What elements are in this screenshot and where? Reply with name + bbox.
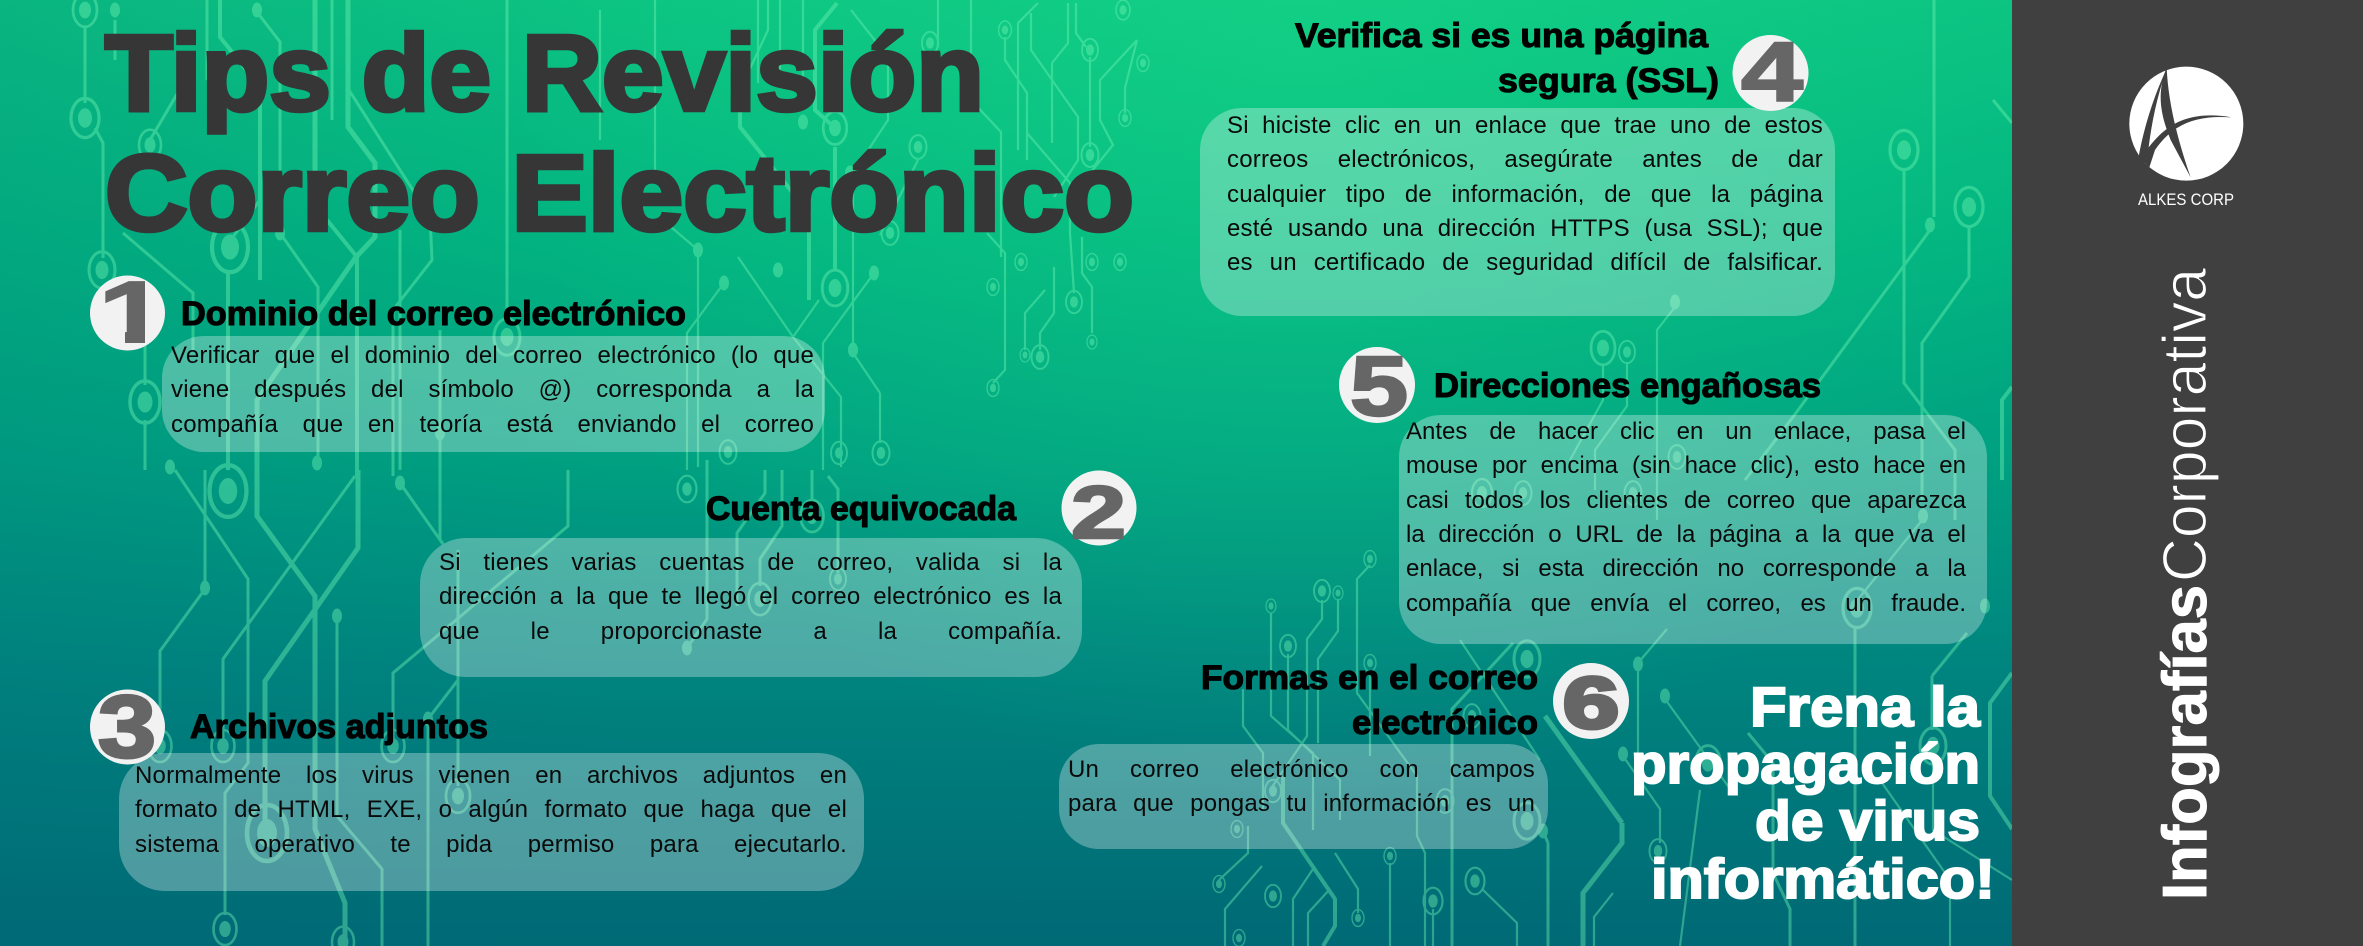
heading 3: Archivos adjuntos xyxy=(190,708,488,746)
dot nodes xyxy=(275,228,285,240)
number badge 5 xyxy=(1339,339,1415,433)
panel 3 xyxy=(119,753,864,891)
tip 1 xyxy=(90,264,825,452)
panel 5: la dirección o URL de la página a la que va el xyxy=(1406,521,1966,548)
panel 4: Si hiciste clic en un enlace que trae uno de estos xyxy=(1227,112,1823,139)
panel 1: viene después del símbolo @) corresponda a la xyxy=(171,376,814,403)
vertical brand text: Infografías xyxy=(2151,585,2220,900)
panel 6: Un correo electrónico con campos xyxy=(1068,756,1535,783)
number badge 4 xyxy=(1732,25,1808,119)
callout: slogan: propagación xyxy=(1631,732,1980,795)
number badge 1 xyxy=(90,276,165,350)
callout: slogan: de virus xyxy=(1755,789,1980,852)
number badge 5: 5 xyxy=(1350,339,1408,433)
ring nodes xyxy=(73,0,97,27)
number badge 3: 3 xyxy=(98,677,156,776)
number badge 4: 4 xyxy=(1741,25,1803,119)
panel 6 xyxy=(1059,744,1548,849)
tip 2 xyxy=(420,470,1136,677)
tip 3 xyxy=(90,677,864,891)
number badge 2 xyxy=(1062,470,1136,554)
icon: logo circle xyxy=(2129,67,2243,181)
panel 4: es un certificado de seguridad difícil de falsificar. xyxy=(1227,249,1823,276)
number badge 6 xyxy=(1553,663,1629,744)
callout: slogan: informático! xyxy=(1651,847,1995,910)
panel 1 xyxy=(162,336,825,452)
number badge 1: 1 xyxy=(98,264,170,361)
logo name: ALKES CORP xyxy=(2138,191,2234,209)
heading 6: electrónico xyxy=(1352,704,1538,742)
panel 2: que le proporcionaste a la compañía. xyxy=(439,618,1062,645)
vertical brand text: Corporativa xyxy=(2151,268,2220,582)
panel 2: Si tienes varias cuentas de correo, valida si la xyxy=(439,549,1062,576)
panel 3: formato de HTML, EXE, o algún formato que haga que el xyxy=(135,796,847,823)
callout: slogan xyxy=(1631,675,1995,910)
heading 4: segura (SSL) xyxy=(1498,62,1719,100)
panel 3: sistema operativo te pida permiso para ejecutarlo. xyxy=(135,831,847,858)
vertical brand text xyxy=(2151,268,2220,900)
panel 3: Normalmente los virus vienen en archivos adjuntos en xyxy=(135,762,847,789)
callout: slogan: Frena la xyxy=(1750,675,1981,738)
panel 5: Antes de hacer clic en un enlace, pasa el xyxy=(1406,418,1966,445)
panel 1: Verificar que el dominio del correo electrónico (lo que xyxy=(171,342,814,369)
heading 4: Verifica si es una página xyxy=(1295,17,1709,55)
heading 4 xyxy=(1295,17,1719,100)
panel 2: dirección a la que te llegó el correo electrónico es la xyxy=(439,583,1062,610)
number badge 3 xyxy=(90,677,165,776)
tip 4 xyxy=(1200,17,1835,316)
panel 5: compañía que envía el correo, es un fraude. xyxy=(1406,590,1966,617)
panel 4: esté usando una dirección HTTPS (usa SSL); que xyxy=(1227,215,1823,242)
panel 5: casi todos los clientes de correo que aparezca xyxy=(1406,487,1966,514)
title: Correo Electrónico xyxy=(105,132,1134,253)
right sidebar xyxy=(2012,0,2363,946)
heading 2: Cuenta equivocada xyxy=(706,490,1017,528)
number badge 2: 2 xyxy=(1071,471,1126,554)
title xyxy=(105,12,1134,253)
logo: Alkes Corp xyxy=(2129,67,2243,209)
panel 4: correos electrónicos, asegúrate antes de dar xyxy=(1227,146,1823,173)
panel 1: compañía que en teoría está enviando el correo xyxy=(171,411,814,438)
heading 5: Direcciones engañosas xyxy=(1434,367,1821,405)
tip 6 xyxy=(1059,659,1629,849)
panel 6: para que pongas tu información es un xyxy=(1068,790,1535,817)
tip 5 xyxy=(1339,339,1987,644)
panel 5: mouse por encima (sin hace clic), esto hace en xyxy=(1406,452,1966,479)
number badge 6: 6 xyxy=(1563,664,1619,744)
panel 2 xyxy=(420,538,1082,677)
heading 6 xyxy=(1201,659,1538,742)
panel 5 xyxy=(1399,415,1987,644)
panel 4: cualquier tipo de información, de que la página xyxy=(1227,181,1823,208)
panel 5: enlace, si esta dirección no corresponde a la xyxy=(1406,555,1966,582)
panel 4 xyxy=(1200,108,1835,316)
title: Tips de Revisión xyxy=(105,12,984,133)
heading 6: Formas en el correo xyxy=(1201,659,1538,697)
heading 1: Dominio del correo electrónico xyxy=(181,295,686,333)
